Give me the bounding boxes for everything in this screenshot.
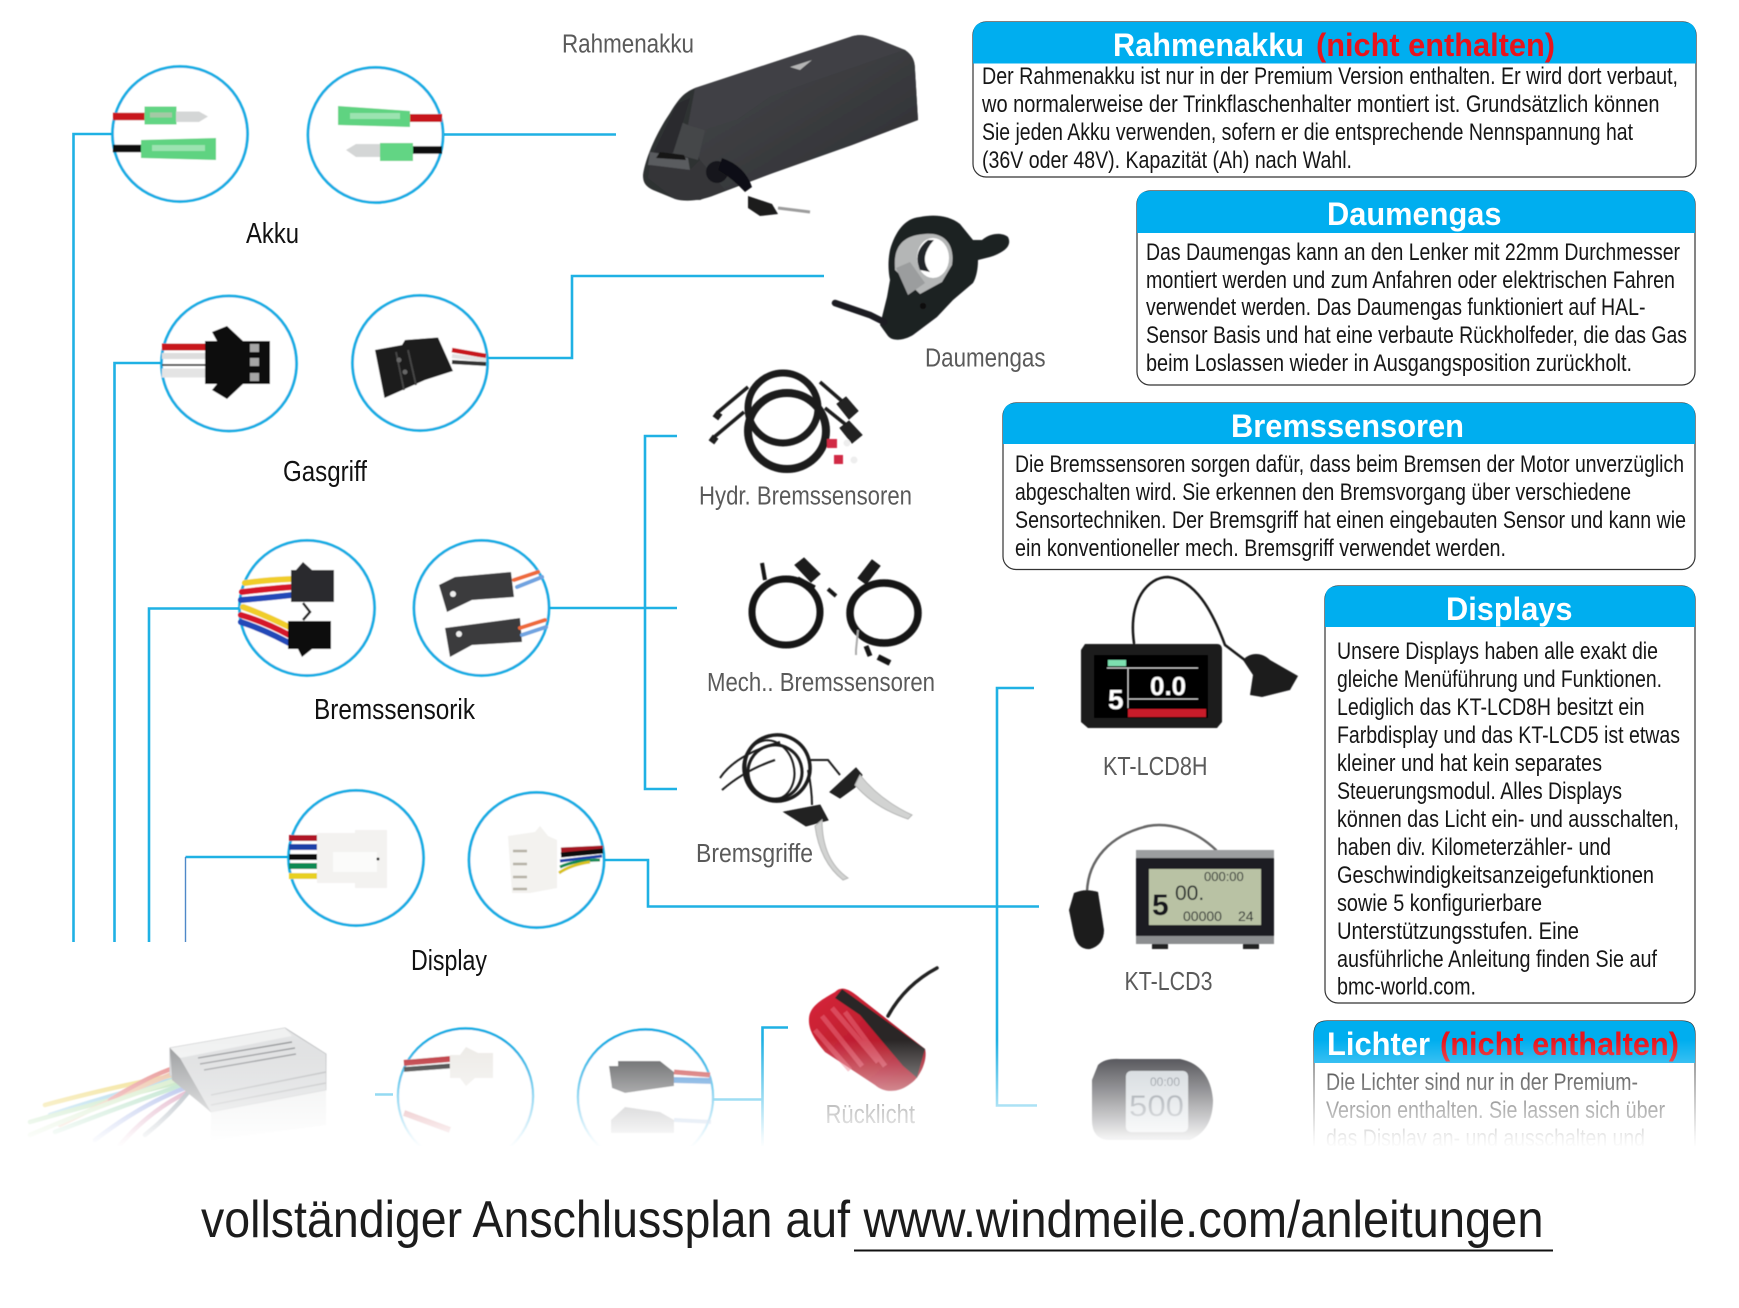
- image: KT-LCD3 display: 000:00: [1204, 869, 1244, 884]
- panel text: Displays: sowie 5 konfigurierbare: [1337, 890, 1542, 917]
- panel text: Displays: haben div. Kilometerzähler- und: [1337, 834, 1611, 861]
- image: hydraulic brake sensors: [710, 373, 862, 469]
- panel heading: Lichter: (nicht enthalten): [1440, 1026, 1679, 1062]
- circle: Display left: [288, 790, 424, 926]
- panel text: Displays: Steuerungsmodul. Alles Displays: [1337, 778, 1622, 805]
- label: Gasgriff: Gasgriff: [283, 456, 368, 488]
- panel: Rahmenakku: [973, 22, 1696, 177]
- image: KT-LCD5 display: 00:00: [1150, 1075, 1180, 1089]
- panel text: Displays: [1337, 638, 1680, 1000]
- panel heading: Rahmenakku: Rahmenakku: [1113, 27, 1304, 63]
- fade overlay: [0, 1040, 1739, 1148]
- image: thumb throttle: [835, 216, 1009, 340]
- panel heading: Displays: Displays: [1446, 591, 1572, 627]
- circle: Display right: [469, 792, 604, 928]
- label: KT-LCD3: KT-LCD3: [1124, 968, 1212, 996]
- label: Daumengas: Daumengas: [925, 344, 1046, 372]
- image: KT-LCD5 display: [1092, 1059, 1213, 1140]
- panel heading: Daumengas: [1137, 191, 1695, 233]
- panel text: Displays: Unsere Displays haben alle exakt die: [1337, 638, 1658, 665]
- panel text: Bremssensoren: ein konventioneller mech. Bremsgriff verwendet werden.: [1015, 535, 1506, 562]
- image: KT-LCD5 display: 500: [1129, 1090, 1184, 1123]
- image: KT-LCD3 display: 00.: [1175, 882, 1204, 905]
- footer link text: vollständiger Anschlussplan auf: [201, 1191, 850, 1249]
- image: KT-LCD3 display: 24: [1238, 908, 1254, 924]
- panel text: Rahmenakku: (36V oder 48V). Kapazität (Ah) nach Wahl.: [982, 147, 1352, 174]
- panel text: Bremssensoren: [1015, 451, 1686, 562]
- panel text: Rahmenakku: [981, 63, 1678, 174]
- panel: Daumengas: [1137, 191, 1695, 385]
- panel: Bremssensoren: [1003, 403, 1695, 570]
- panel text: Lichter: [1326, 1069, 1665, 1152]
- panel text: Displays: kleiner und hat kein separates: [1337, 750, 1602, 777]
- panel heading: Lichter: [1314, 1021, 1695, 1063]
- panel heading: Bremssensoren: Bremssensoren: [1231, 408, 1464, 444]
- label: Rücklicht: Rücklicht: [826, 1101, 915, 1129]
- image: KT-LCD8H display: 0.0: [1150, 671, 1186, 701]
- label: Akku: Akku: [246, 218, 299, 250]
- panel text: Daumengas: [1146, 239, 1687, 377]
- panel text: Displays: Lediglich das KT-LCD8H besitzt ein: [1337, 694, 1644, 721]
- panel text: Daumengas: beim Loslassen wieder in Ausgangsposition zurückholt.: [1146, 350, 1632, 377]
- panel text: Displays: Geschwindigkeitsanzeigefunktionen: [1337, 862, 1654, 889]
- panel: Displays: [1325, 586, 1695, 1003]
- panel heading: Lichter: Lichter: [1327, 1026, 1430, 1062]
- circle: Akku right: [308, 68, 443, 202]
- image: frame battery: [643, 35, 918, 216]
- label: KT-LCD8H: KT-LCD8H: [1103, 753, 1208, 781]
- connector lines: [74, 134, 1039, 1150]
- label: Rahmenakku: Rahmenakku: [562, 30, 694, 58]
- image: KT-LCD3 display: 00000: [1183, 908, 1222, 924]
- image: KT-LCD8H display: [1081, 577, 1298, 728]
- image: mechanical brake sensors: [752, 558, 918, 663]
- circle: Gasgriff right: [352, 296, 488, 430]
- panel text: Lichter: das Display an- und ausschalten und: [1326, 1125, 1645, 1152]
- image: brake levers: [720, 728, 912, 880]
- panel text: Displays: Unterstützungsstufen. Eine: [1337, 918, 1579, 945]
- label: Display: Display: [411, 945, 487, 977]
- circle: Bremssensorik right: [414, 540, 549, 676]
- panel text: Displays: ausführliche Anleitung finden Sie auf: [1337, 946, 1657, 973]
- circle: Bremssensorik left: [240, 540, 374, 676]
- image: KT-LCD3 display: 5: [1152, 889, 1169, 922]
- panel text: Displays: bmc-world.com.: [1337, 974, 1476, 1000]
- panel heading: Bremssensoren: [1003, 403, 1695, 444]
- label: Bremsgriffe: Bremsgriffe: [696, 840, 813, 868]
- footer link text: [201, 1191, 1553, 1250]
- panel heading: Rahmenakku: (nicht enthalten): [1316, 27, 1555, 63]
- image: rear light: [809, 968, 937, 1091]
- panel heading: Displays: [1325, 586, 1695, 627]
- panel text: Lichter: Version enthalten. Sie lassen sich über: [1326, 1097, 1665, 1124]
- circle: lower left: [398, 1028, 533, 1164]
- circle: lower right: [578, 1030, 713, 1164]
- circle: Gasgriff left: [162, 296, 296, 431]
- label: Bremssensorik: Bremssensorik: [314, 694, 475, 726]
- footer link text: www.windmeile.com/anleitungen: [863, 1191, 1544, 1249]
- circle: Akku left: [112, 66, 248, 202]
- image: KT-LCD3 display: [1069, 825, 1274, 949]
- panel heading: Rahmenakku: [973, 22, 1696, 64]
- controller box: [30, 1028, 326, 1145]
- label: Mech.. Bremssensoren: Mech.. Bremssensoren: [707, 669, 935, 697]
- image: KT-LCD8H display: 5: [1108, 684, 1124, 715]
- panel text: Lichter: Die Lichter sind nur in der Premium-: [1326, 1069, 1638, 1096]
- panel text: Displays: gleiche Menüführung und Funktionen.: [1337, 666, 1662, 693]
- panel heading: Daumengas: Daumengas: [1327, 196, 1502, 232]
- label: Hydr. Bremssensoren: Hydr. Bremssensoren: [699, 482, 912, 510]
- panel: Lichter: [1314, 1021, 1695, 1160]
